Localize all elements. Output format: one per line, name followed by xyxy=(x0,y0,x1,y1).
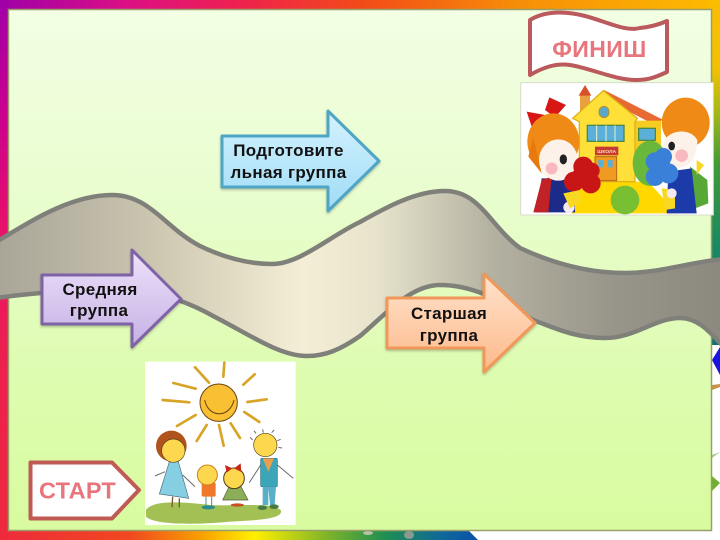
finish banner: ФИНИШ xyxy=(552,36,647,62)
arrow: Подготовительная группа: льная группа xyxy=(231,163,347,182)
boy xyxy=(662,98,710,213)
arrow: Подготовительная группа: Подготовите xyxy=(233,141,344,160)
ground xyxy=(572,182,677,213)
arrow: Средняя группа: Средняя xyxy=(62,280,138,299)
blue flowers xyxy=(646,148,678,210)
arrow: Средняя группа: группа xyxy=(70,301,128,320)
school building: ШКОЛА xyxy=(597,149,617,155)
arrow: Старшая группа xyxy=(387,274,535,372)
road xyxy=(0,191,720,356)
arrow: Старшая группа: группа xyxy=(420,326,478,345)
start sign: СТАРТ xyxy=(39,478,116,504)
arrow: Старшая группа: Старшая xyxy=(411,304,487,323)
mother xyxy=(155,431,195,507)
picture: children and school xyxy=(521,83,713,215)
bushes xyxy=(611,141,667,214)
sun xyxy=(163,363,267,446)
daughter xyxy=(223,463,248,507)
arrow: Средняя группа xyxy=(42,250,181,347)
school building xyxy=(573,85,662,182)
son xyxy=(197,465,217,509)
arrow: Подготовительная группа xyxy=(222,111,379,211)
father xyxy=(249,429,293,510)
grass xyxy=(146,502,281,524)
red flowers xyxy=(563,157,601,208)
girl xyxy=(527,97,579,213)
finish banner xyxy=(530,13,667,80)
start sign xyxy=(30,462,139,518)
picture: sun and family xyxy=(145,362,296,525)
